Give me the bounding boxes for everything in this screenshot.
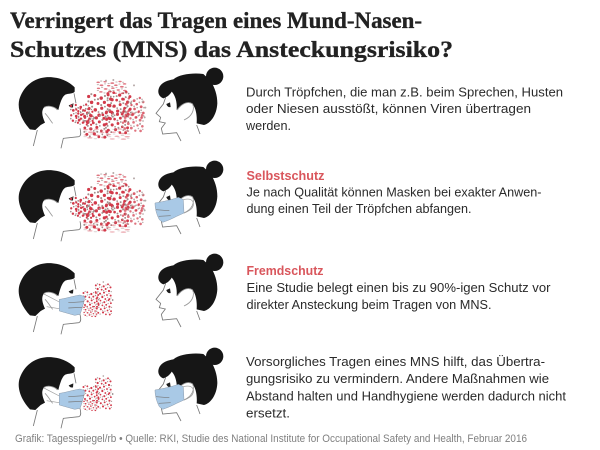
text block: Fremdschutz: Fremdschutz — [246, 263, 324, 278]
illustration: no masks, droplets reach the other person — [19, 68, 223, 148]
text block: Selbstschutz: Je nach Qualität können Masken bei exakter Anwen- — [246, 185, 542, 200]
illustration: both wear masks — [19, 348, 223, 428]
text block: transmission: oder Niesen ausstößt, können Viren übertragen — [246, 101, 531, 116]
text block: precaution: Vorsorgliches Tragen eines MNS hilft, das Übertra- — [246, 354, 545, 369]
text block: Selbstschutz — [246, 168, 542, 216]
source line: Grafik: Tagesspiegel/rb • Quelle: RKI, Studie des National Institute for Occupational Safety and Health, Februar 2016 — [15, 433, 527, 445]
text block: transmission — [245, 84, 563, 133]
title — [10, 8, 453, 62]
illustration: protecting others, speaker wears mask — [19, 254, 223, 334]
title: Schutzes (MNS) das Ansteckungsrisiko? — [10, 37, 453, 62]
text block: precaution: ersetzt. — [246, 406, 290, 420]
text block: Selbstschutz: Selbstschutz — [246, 168, 325, 183]
text block: precaution — [246, 354, 566, 420]
title: Verringert das Tragen eines Mund-Nasen- — [10, 8, 422, 33]
text block: transmission: werden. — [245, 118, 291, 133]
text block: Fremdschutz: Eine Studie belegt einen bis zu 90%-igen Schutz vor — [246, 280, 551, 295]
text block: Fremdschutz: direkter Ansteckung beim Tragen von MNS. — [246, 297, 492, 312]
text block: Selbstschutz: dung einen Teil der Tröpfchen abfangen. — [246, 201, 472, 216]
text block: Fremdschutz — [246, 263, 551, 312]
text block: transmission: Durch Tröpfchen, die man z.B. beim Sprechen, Husten — [246, 84, 563, 100]
text block: precaution: gungsrisiko zu vermindern. Andere Maßnahmen wie — [246, 371, 549, 386]
text block: precaution: Abstand halten und Handhygiene werden dadurch nicht — [246, 388, 566, 404]
illustration: self protection, receiver wears mask — [19, 161, 223, 241]
